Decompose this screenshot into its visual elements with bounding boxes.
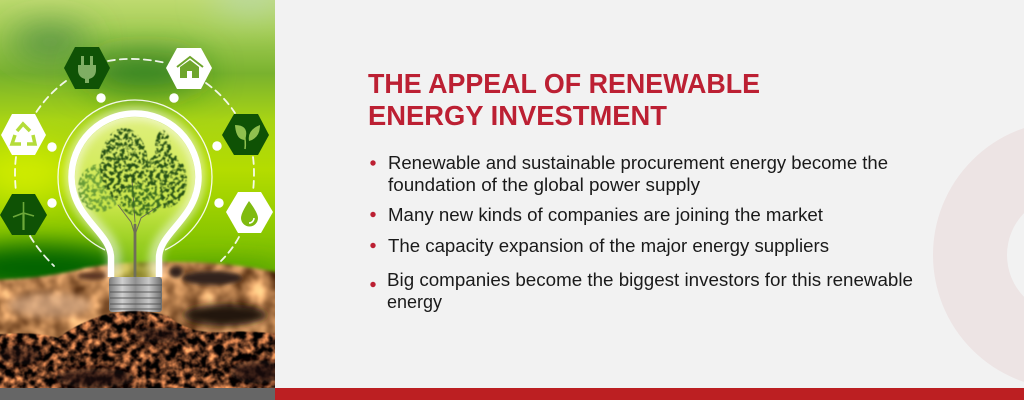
footer bar: grey segment xyxy=(0,388,275,400)
icon: leaves xyxy=(222,114,269,155)
bulb thin outer ring xyxy=(58,100,212,250)
icon: plug xyxy=(64,47,110,89)
title: ENERGY INVESTMENT xyxy=(368,100,667,131)
icon: recycle xyxy=(1,114,46,155)
screw base xyxy=(109,277,162,312)
bulb bright filament outline xyxy=(72,114,198,277)
bullet 1: Renewable and sustainable procurement energy become the xyxy=(388,153,888,173)
icon: house xyxy=(166,48,212,89)
bullet 4: energy xyxy=(387,292,442,312)
bullet list xyxy=(370,153,913,312)
photo: light bulb with tree in soil xyxy=(0,0,295,400)
icon: wind turbine xyxy=(0,194,47,235)
tree xyxy=(78,128,187,277)
soil: textured foreground xyxy=(0,310,275,388)
bulb glass fill xyxy=(75,117,195,277)
bullet 1 xyxy=(370,153,888,195)
footer bar: red segment xyxy=(275,388,1024,400)
bullet 4: Big companies become the biggest investors for this renewable xyxy=(387,270,913,290)
icon: water drop xyxy=(226,192,273,233)
title: THE APPEAL OF RENEWABLE xyxy=(368,68,760,99)
bullet 1: foundation of the global power supply xyxy=(388,175,700,195)
bulb glow xyxy=(72,114,198,277)
bullet 4 xyxy=(370,270,913,312)
soil: blurred mid ground xyxy=(0,260,275,339)
bullet 3: The capacity expansion of the major energy suppliers xyxy=(388,236,829,256)
bullet 2: Many new kinds of companies are joining the market xyxy=(388,205,823,225)
title xyxy=(368,68,760,131)
small white dots xyxy=(47,93,224,208)
green blurred background xyxy=(0,0,275,282)
decorative ring xyxy=(970,158,1024,352)
dashed connector ring xyxy=(15,59,254,266)
